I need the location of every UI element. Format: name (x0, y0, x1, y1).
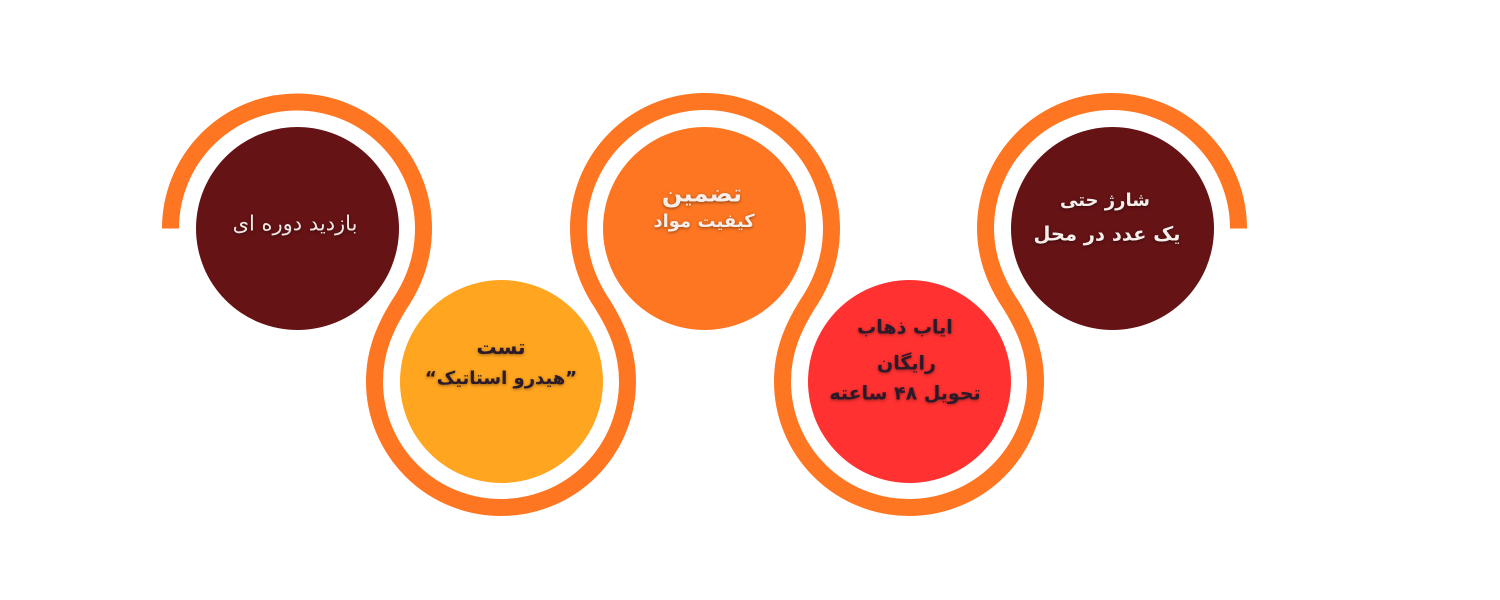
label: hydrostatic test: تست (476, 335, 526, 359)
circle 3: material quality guarantee (603, 127, 806, 330)
label: periodic visit: بازدید دوره ای (233, 211, 357, 235)
label: material quality guarantee: کیفیت مواد (653, 211, 755, 232)
label: free round trip, 48 hour delivery (829, 317, 981, 407)
label: free round trip, 48 hour delivery: تحویل ۴۸ ساعته (829, 383, 981, 405)
circle 5: single-unit on-site charging (1011, 127, 1214, 330)
label: free round trip, 48 hour delivery: رایگان (877, 353, 936, 375)
label: hydrostatic test: ”هیدرو استاتیک“ (425, 368, 577, 389)
label: single-unit on-site charging: یک عدد در محل (1033, 222, 1180, 245)
circle 4: free round trip (808, 280, 1011, 483)
label: material quality guarantee: تضمین (662, 180, 742, 208)
label: single-unit on-site charging (1033, 190, 1180, 248)
label: hydrostatic test (425, 335, 577, 392)
label: single-unit on-site charging: شارژ حتی (1060, 190, 1150, 211)
label: material quality guarantee (653, 180, 756, 234)
label: free round trip, 48 hour delivery: ایاب ذهاب (857, 317, 953, 339)
circle 2: hydrostatic test (400, 280, 603, 483)
circle 1: periodic visit (196, 127, 399, 330)
